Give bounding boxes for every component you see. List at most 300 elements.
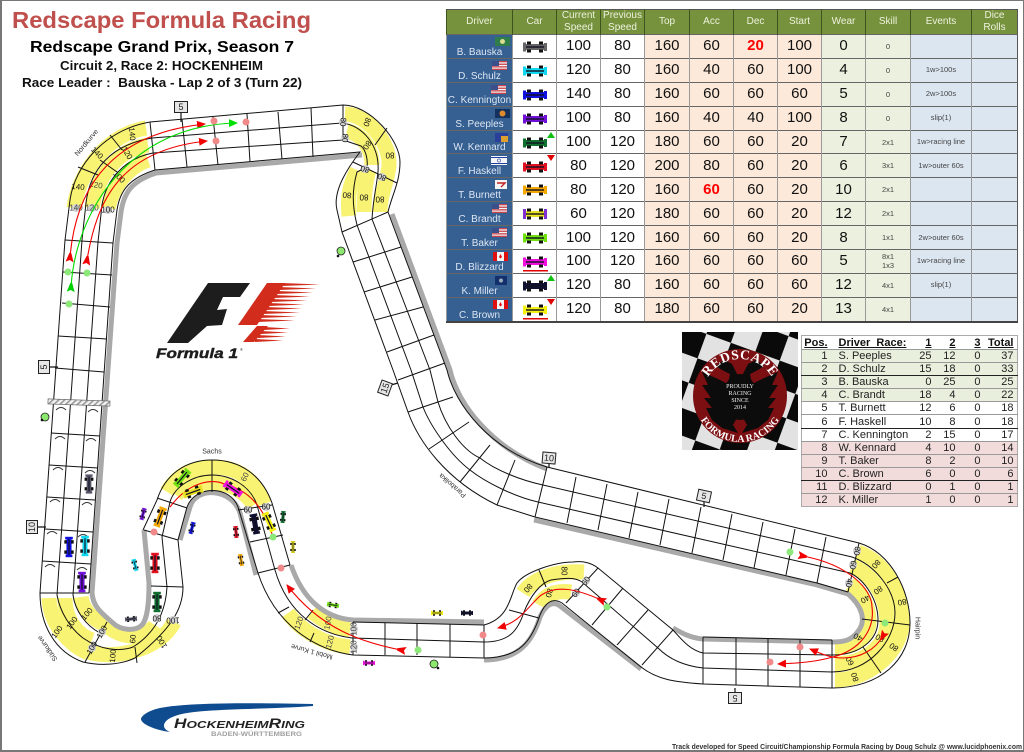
standing 8: 8	[821, 442, 828, 454]
cars off track	[125, 507, 473, 666]
row: T. Baker: 100	[566, 229, 591, 246]
row: S. Peeples: 0	[886, 114, 890, 123]
standing 4: C. Brandt	[838, 389, 885, 401]
standing 10: C. Brown	[838, 468, 884, 480]
row: B. Bauska: 160	[654, 37, 680, 54]
standing 10: 0	[974, 468, 980, 480]
row: C. Kennington: 60	[791, 85, 808, 102]
speed labels: Sudkurve, Sachs, Mobil 1: 100	[322, 615, 334, 630]
row: W. Kennard: 100	[566, 133, 591, 150]
row: D. Blizzard: 160	[654, 252, 680, 269]
standing 1: 1	[821, 350, 828, 362]
standing 7	[821, 429, 1014, 441]
table header: Current	[562, 10, 595, 21]
standing 10: 6	[1007, 468, 1014, 480]
standing 1: S. Peeples	[838, 350, 892, 362]
standing 6: F. Haskell	[838, 416, 886, 428]
row: T. Burnett: 2x1	[882, 185, 894, 194]
row: S. Peeples: S. Peeples	[455, 119, 504, 130]
row: F. Haskell: 20	[791, 157, 808, 174]
speed labels: Hairpin and bump: 80	[521, 582, 534, 595]
speed labels: Nordkurve: 80	[342, 190, 352, 200]
standing 2: 18	[943, 363, 956, 375]
row: C. Brandt: 12	[835, 205, 852, 222]
row: B. Bauska: 60	[703, 37, 720, 54]
standing 12: 1	[1007, 494, 1014, 506]
distance markers: 5	[701, 491, 707, 501]
corner names: Nordkurve	[74, 128, 100, 158]
speed labels: Nordkurve: 80	[340, 133, 350, 143]
standing 2: 15	[919, 363, 932, 375]
row: W. Kennard: 20	[791, 133, 808, 150]
row: C. Kennington: 60	[747, 85, 764, 102]
speed labels: Nordkurve	[69, 116, 394, 214]
standings header: Total	[988, 336, 1014, 348]
speed labels: Nordkurve: 80	[385, 150, 394, 160]
standing 12: 12	[815, 494, 828, 506]
row: C. Brandt: 180	[654, 205, 680, 222]
standing 6	[821, 416, 1014, 428]
speed labels: Sudkurve, Sachs, Mobil 1: 60	[128, 634, 138, 644]
standing 11: 0	[925, 481, 932, 493]
standing 5	[821, 402, 1014, 414]
row: B. Bauska: B. Bauska	[457, 47, 502, 58]
corner names: Sachs	[202, 448, 222, 456]
standing 1: 12	[943, 350, 956, 362]
standing 11	[802, 481, 1017, 493]
row: C. Brown: 60	[747, 300, 764, 317]
standing 8	[802, 442, 1017, 454]
standing 1: 37	[1001, 350, 1014, 362]
speed labels: Nordkurve: 80	[338, 117, 348, 127]
row: K. Miller: slip(1)	[931, 280, 951, 289]
row: B. Bauska: 100	[566, 37, 591, 54]
speed labels: Sudkurve, Sachs, Mobil 1	[49, 471, 358, 663]
speed labels: Sudkurve, Sachs, Mobil 1: 100	[154, 633, 169, 650]
row: F. Haskell: 120	[610, 157, 635, 174]
standing 7: 17	[1001, 429, 1014, 441]
logo: Hockenheimring: H OCKENHEIM R ING	[174, 716, 305, 731]
row: W. Kennard: 120	[610, 133, 635, 150]
speed labels: Hairpin and bump: 80	[852, 546, 862, 557]
row: D. Schulz: D. Schulz	[458, 71, 501, 82]
speed labels: Nordkurve: 80	[359, 163, 370, 174]
standing 11: D. Blizzard	[838, 481, 892, 493]
row: K. Miller: 80	[614, 276, 631, 293]
row: K. Miller: 120	[566, 276, 591, 293]
speed labels: Hairpin and bump: 60	[580, 574, 593, 587]
standing 2: 0	[974, 363, 980, 375]
speed labels: Sudkurve, Sachs, Mobil 1: 100	[64, 615, 80, 631]
standing 6: 8	[949, 416, 956, 428]
standing 11: 0	[974, 481, 980, 493]
row: T. Baker: 8	[839, 229, 848, 246]
table header: Driver	[466, 16, 493, 27]
table header: Events	[926, 16, 956, 27]
speed labels: Hairpin and bump: 80	[869, 558, 882, 571]
row: F. Haskell: 60	[747, 157, 764, 174]
row: T. Burnett: 80	[570, 181, 587, 198]
logo: Hockenheimring: BADEN-WÜRTTEMBERG	[211, 729, 302, 738]
standing 12: 0	[949, 494, 956, 506]
table header: Car	[526, 16, 543, 27]
row: D. Blizzard: 8x1	[882, 252, 894, 261]
speed labels: Hairpin and bump	[521, 546, 907, 683]
speed labels: Sudkurve, Sachs, Mobil 1: 100	[108, 648, 118, 663]
row: C. Brown: 80	[614, 300, 631, 317]
row: W. Kennard	[447, 131, 1017, 153]
row: D. Blizzard	[447, 250, 1017, 273]
row: S. Peeples: 8	[839, 109, 848, 126]
row: B. Bauska: 20	[747, 37, 764, 54]
standing 8: 0	[974, 442, 980, 454]
table header: Wear	[832, 16, 855, 27]
row: C. Brandt	[447, 202, 1017, 225]
title block: Race Leader : Bauska - Lap 2 of 3 (Turn 22)	[22, 76, 302, 90]
row: T. Baker: 20	[791, 229, 808, 246]
standing 4: 18	[919, 389, 932, 401]
row: C. Brandt: 120	[610, 205, 635, 222]
standing 2: 2	[821, 363, 828, 375]
standing 6: 18	[1001, 416, 1014, 428]
row: S. Peeples: 100	[787, 109, 812, 126]
standing 9: 8	[925, 455, 932, 467]
yellow corner zones	[49, 114, 902, 680]
speed labels: Nordkurve: 140	[71, 182, 86, 192]
row: B. Bauska: 0	[886, 42, 890, 51]
speed labels: Hairpin and bump: 80	[543, 588, 554, 599]
row: C. Kennington: 5	[839, 85, 848, 102]
standing 5: 6	[949, 402, 956, 414]
row: D. Blizzard: D. Blizzard	[455, 262, 504, 273]
speed labels: Nordkurve: 80	[360, 139, 373, 152]
row: T. Burnett: T. Burnett	[458, 190, 501, 201]
speed labels: Sudkurve, Sachs, Mobil 1: 100	[95, 623, 110, 640]
row: S. Peeples: 100	[566, 109, 591, 126]
speed labels: Sudkurve, Sachs, Mobil 1: 60	[239, 471, 251, 483]
speed labels: Hairpin and bump: 40	[844, 578, 854, 589]
distance markers: 10	[544, 453, 554, 463]
row: C. Brandt: C. Brandt	[458, 214, 501, 225]
speed labels: Sudkurve, Sachs, Mobil 1: 100	[166, 616, 180, 624]
standing 5: T. Burnett	[838, 402, 886, 414]
standing 3: 0	[974, 376, 980, 388]
row: T. Baker: 60	[703, 229, 720, 246]
standing 3: 0	[925, 376, 932, 388]
speed labels: Sudkurve, Sachs, Mobil 1: 100	[49, 624, 65, 640]
speed labels: Sudkurve, Sachs, Mobil 1: 60	[262, 502, 271, 512]
row: F. Haskell: 3x1	[882, 161, 894, 170]
standing 8: 10	[943, 442, 956, 454]
standings header: Pos.	[804, 336, 828, 348]
speed labels: Nordkurve: 140	[69, 204, 83, 212]
row: W. Kennard: W. Kennard	[453, 142, 506, 153]
standing 6: 6	[821, 416, 828, 428]
standing 12	[802, 494, 1017, 506]
table header: Dec	[747, 16, 764, 27]
standing 4: 4	[949, 389, 956, 401]
row: K. Miller: 4x1	[882, 281, 894, 290]
standing 7: 2	[925, 429, 932, 441]
row: D. Schulz: 1w>100s	[926, 65, 956, 74]
corner names: Mobil 1 Kurve	[290, 642, 334, 660]
grid slot arcs	[45, 408, 98, 570]
row: D. Schulz: 4	[839, 61, 848, 78]
row: D. Blizzard: 100	[566, 252, 591, 269]
standing 4: 4	[821, 389, 828, 401]
standing 4	[802, 389, 1017, 401]
row: W. Kennard: 60	[703, 133, 720, 150]
standing 7: 15	[943, 429, 956, 441]
row: T. Burnett: 160	[654, 181, 680, 198]
row: K. Miller	[447, 274, 1017, 297]
logo: Formula 1: ®	[240, 347, 243, 352]
row: D. Schulz: 0	[886, 66, 890, 75]
row: S. Peeples: slip(1)	[931, 113, 951, 122]
row: W. Kennard: 7	[839, 133, 848, 150]
row: T. Burnett: 60	[703, 181, 720, 198]
logo: Redscape Formula Racing badge: REDSCAPE	[701, 350, 778, 377]
standing 10: 10	[815, 468, 828, 480]
distance markers	[26, 102, 742, 704]
row: F. Haskell: F. Haskell	[458, 166, 501, 177]
corner names: Südkurve	[37, 634, 59, 662]
row: F. Haskell: 200	[654, 157, 680, 174]
table header: Dice	[984, 10, 1004, 21]
title block: Redscape Grand Prix, Season 7	[30, 39, 294, 56]
row: T. Burnett: 20	[791, 181, 808, 198]
row: D. Blizzard: 60	[791, 252, 808, 269]
row: C. Brandt: 20	[791, 205, 808, 222]
row: C. Brandt: 60	[703, 205, 720, 222]
logo: Hockenheimring	[141, 703, 313, 738]
speed labels: Nordkurve: 80	[376, 171, 388, 183]
championship standings table	[801, 335, 1018, 507]
logo: Redscape Formula Racing badge: SINCE	[731, 398, 749, 404]
row: S. Peeples: 80	[614, 109, 631, 126]
standing 11: 1	[949, 481, 956, 493]
standing 2	[802, 363, 1017, 375]
standing 6: 0	[974, 416, 980, 428]
row: W. Kennard: 1w>racing line	[917, 137, 965, 146]
standing 3: 25	[943, 376, 956, 388]
row: D. Schulz: 40	[703, 61, 720, 78]
speed labels: Hairpin and bump: 60	[570, 586, 583, 599]
row: K. Miller: K. Miller	[461, 286, 498, 297]
row: F. Haskell	[447, 154, 1017, 177]
track gray kerbs	[92, 155, 862, 669]
table header: Acc	[703, 16, 720, 27]
row: T. Baker: 160	[654, 229, 680, 246]
row: C. Kennington: C. Kennington	[448, 95, 511, 106]
row: C. Brown: 4x1	[882, 305, 894, 314]
track edges and lane lines	[40, 105, 910, 688]
distance markers: 5	[178, 102, 184, 112]
row: D. Schulz: 80	[614, 61, 631, 78]
row: D. Schulz: 60	[747, 61, 764, 78]
start finish line	[48, 399, 110, 406]
standings header: 1	[925, 336, 932, 348]
logo: Formula 1: Formula 1	[156, 346, 238, 361]
speed labels: Hairpin and bump: 40	[858, 593, 871, 605]
speed labels: Nordkurve: 80	[359, 192, 368, 202]
row: D. Schulz: 100	[787, 61, 812, 78]
standing 9: 0	[974, 455, 980, 467]
standing 1	[802, 350, 1017, 362]
standing 10: 0	[949, 468, 956, 480]
row: F. Haskell: 80	[703, 157, 720, 174]
corner names: Hairpin	[914, 617, 920, 639]
logo: Redscape Formula Racing badge: RACING	[728, 391, 752, 397]
standings header: Driver Race:	[838, 336, 906, 348]
standing 3: 3	[821, 376, 828, 388]
row: C. Brown	[447, 298, 1017, 321]
row: D. Schulz	[447, 59, 1017, 82]
standing 2: 33	[1001, 363, 1014, 375]
standing 8: W. Kennard	[838, 442, 896, 454]
distance markers: 10	[27, 522, 37, 532]
standing 1: 25	[919, 350, 932, 362]
row: C. Brown: 180	[654, 300, 680, 317]
standing 9: 2	[949, 455, 956, 467]
row: T. Baker	[447, 226, 1017, 249]
row: W. Kennard: 180	[654, 133, 680, 150]
standing 5: 0	[974, 402, 980, 414]
row: D. Schulz: 160	[654, 61, 680, 78]
standing 9	[802, 455, 1017, 467]
move origin dots	[64, 118, 888, 666]
speed labels: Nordkurve: 100	[101, 206, 115, 214]
row: D. Blizzard: 5	[839, 252, 848, 269]
row: S. Peeples: 40	[703, 109, 720, 126]
logo: Redscape Formula Racing badge: PROUDLY	[726, 384, 755, 390]
standings header: 2	[949, 336, 956, 348]
standing 6: 10	[919, 416, 932, 428]
row: C. Brown: 120	[566, 300, 591, 317]
standings header	[802, 336, 1017, 506]
speed labels: Nordkurve: 120	[120, 145, 135, 162]
row: T. Burnett: 60	[747, 181, 764, 198]
speed labels: Sudkurve, Sachs, Mobil 1: 120	[292, 615, 306, 631]
speed labels: Hairpin and bump: 80	[887, 640, 900, 653]
table header: Skill	[879, 16, 897, 27]
standing 9: 10	[1001, 455, 1014, 467]
speed labels: Hairpin and bump: 60	[844, 654, 856, 667]
row: C. Kennington: 140	[566, 85, 591, 102]
title block: Circuit 2, Race 2: HOCKENHEIM	[60, 59, 263, 73]
logo: Formula 1	[156, 283, 320, 361]
row: F. Haskell: 80	[570, 157, 587, 174]
speed labels: Nordkurve: 80	[375, 194, 384, 204]
row: D. Blizzard: 1w>racing line	[917, 256, 965, 265]
row: F. Haskell: 6	[839, 157, 848, 174]
table header: Previous	[603, 10, 642, 21]
row: B. Bauska: 100	[787, 37, 812, 54]
standing 5: 18	[1001, 402, 1014, 414]
row: W. Kennard: 60	[747, 133, 764, 150]
move arrows	[70, 123, 883, 664]
row: F. Haskell: 1w>outer 60s	[918, 161, 964, 170]
row: C. Kennington: 60	[703, 85, 720, 102]
row: C. Brandt: 60	[747, 205, 764, 222]
distance markers: 5	[732, 693, 738, 703]
row: B. Bauska: 80	[614, 37, 631, 54]
standing 4: 22	[1001, 389, 1014, 401]
table header: Speed	[564, 22, 593, 33]
row: D. Blizzard: 120	[610, 252, 635, 269]
speed labels: Hairpin and bump: 80	[871, 584, 884, 597]
row: C. Kennington: 160	[654, 85, 680, 102]
speed labels: Nordkurve: 100	[111, 169, 127, 185]
standing 12: 1	[925, 494, 932, 506]
row: W. Kennard: 2x1	[882, 138, 894, 146]
row: C. Kennington: 80	[614, 85, 631, 102]
speed labels: Nordkurve: 80	[361, 116, 373, 128]
title block	[12, 7, 311, 90]
table header: Speed	[608, 22, 637, 33]
row: T. Baker: 2w>outer 60s	[918, 233, 964, 242]
speed labels: Hairpin and bump: 80	[873, 632, 886, 644]
row: S. Peeples	[447, 107, 1017, 130]
row: D. Schulz: 120	[566, 61, 591, 78]
distance markers: 15	[379, 382, 391, 394]
row: D. Blizzard: 1x3	[882, 261, 894, 270]
row: C. Kennington: 0	[886, 90, 890, 99]
icon: green dials	[41, 247, 439, 669]
standing 10	[802, 468, 1017, 480]
table header	[447, 10, 1017, 321]
standing 3: 25	[1001, 376, 1014, 388]
row: T. Burnett	[447, 178, 1017, 201]
standing 3: B. Bauska	[838, 376, 889, 388]
speed labels: Nordkurve: 140	[89, 145, 105, 161]
speed labels: Sudkurve, Sachs, Mobil 1: 120	[350, 640, 358, 654]
gray speed dots	[72, 118, 861, 652]
corner names: Parabolika	[438, 471, 468, 498]
standing 8: 4	[925, 442, 932, 454]
row: T. Baker: 1x1	[882, 233, 894, 242]
logo: Redscape Formula Racing badge: FORMULA RACING	[700, 416, 779, 442]
row: C. Brown: 13	[835, 300, 852, 317]
standing 9: 9	[821, 455, 828, 467]
logo: Redscape Formula Racing badge	[682, 332, 798, 450]
standing 11: 1	[1007, 481, 1014, 493]
title block: Redscape Formula Racing	[12, 7, 311, 33]
distance markers: 5	[39, 364, 49, 370]
standing 12: 0	[974, 494, 980, 506]
speed labels: Hairpin and bump: 80	[849, 671, 861, 683]
row: C. Brown: C. Brown	[459, 310, 500, 321]
row: D. Blizzard: 60	[703, 252, 720, 269]
row: C. Brandt: 60	[570, 205, 587, 222]
standing 7: C. Kennington	[838, 429, 908, 441]
standing 12: K. Miller	[838, 494, 878, 506]
row: K. Miller: 160	[654, 276, 680, 293]
standing 4: 0	[974, 389, 980, 401]
row: C. Kennington	[447, 83, 1017, 106]
standing 11: 11	[816, 481, 828, 493]
row: T. Baker: T. Baker	[461, 238, 498, 249]
row: T. Burnett: 10	[835, 181, 852, 198]
standing 7: 0	[974, 429, 980, 441]
standing 3	[802, 376, 1017, 388]
speed labels: Nordkurve: 120	[89, 179, 104, 191]
speed labels: Sudkurve, Sachs, Mobil 1: 60	[244, 506, 253, 514]
cars on track	[64, 467, 278, 612]
speed labels: Sudkurve, Sachs, Mobil 1: 100	[85, 639, 100, 656]
speed labels: Hairpin and bump: 60	[848, 560, 858, 571]
speed labels: Nordkurve: 120	[85, 204, 99, 212]
